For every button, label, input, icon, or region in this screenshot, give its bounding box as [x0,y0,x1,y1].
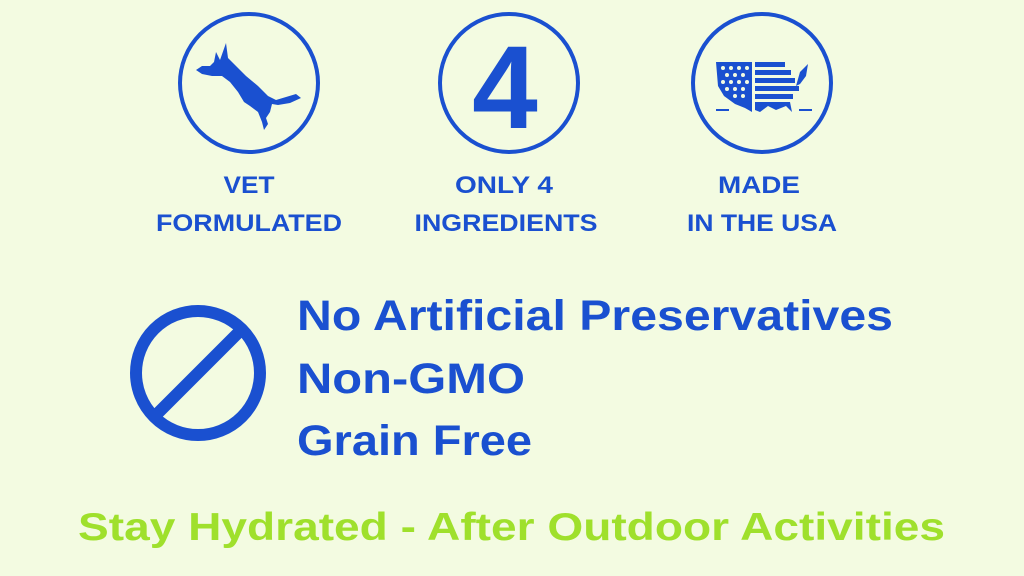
label: vet formulated [156,172,342,237]
label: vet formulated: FORMULATED [156,210,342,237]
icon: usa flag map [693,14,831,152]
label: vet formulated: VET [224,172,275,199]
text block: free-from claims [297,292,893,465]
label: made in the usa: MADE [718,172,800,199]
icon: number 4 [440,14,578,154]
label: made in the usa [687,172,837,237]
label: made in the usa: IN THE USA [687,210,837,237]
text block: free-from claims: Non-GMO [297,355,525,403]
text block: free-from claims: No Artificial Preservatives [297,292,893,340]
label: only 4 ingredients: ONLY 4 [455,172,554,199]
label: only 4 ingredients [414,172,598,237]
icon: vet dog [180,14,318,152]
text block: free-from claims: Grain Free [297,417,532,465]
label: only 4 ingredients: INGREDIENTS [414,210,598,237]
icon: prohibited sign [136,311,260,435]
icon: number 4: 4 [472,22,538,154]
footer tagline: Stay Hydrated - After Outdoor Activities [78,506,945,549]
